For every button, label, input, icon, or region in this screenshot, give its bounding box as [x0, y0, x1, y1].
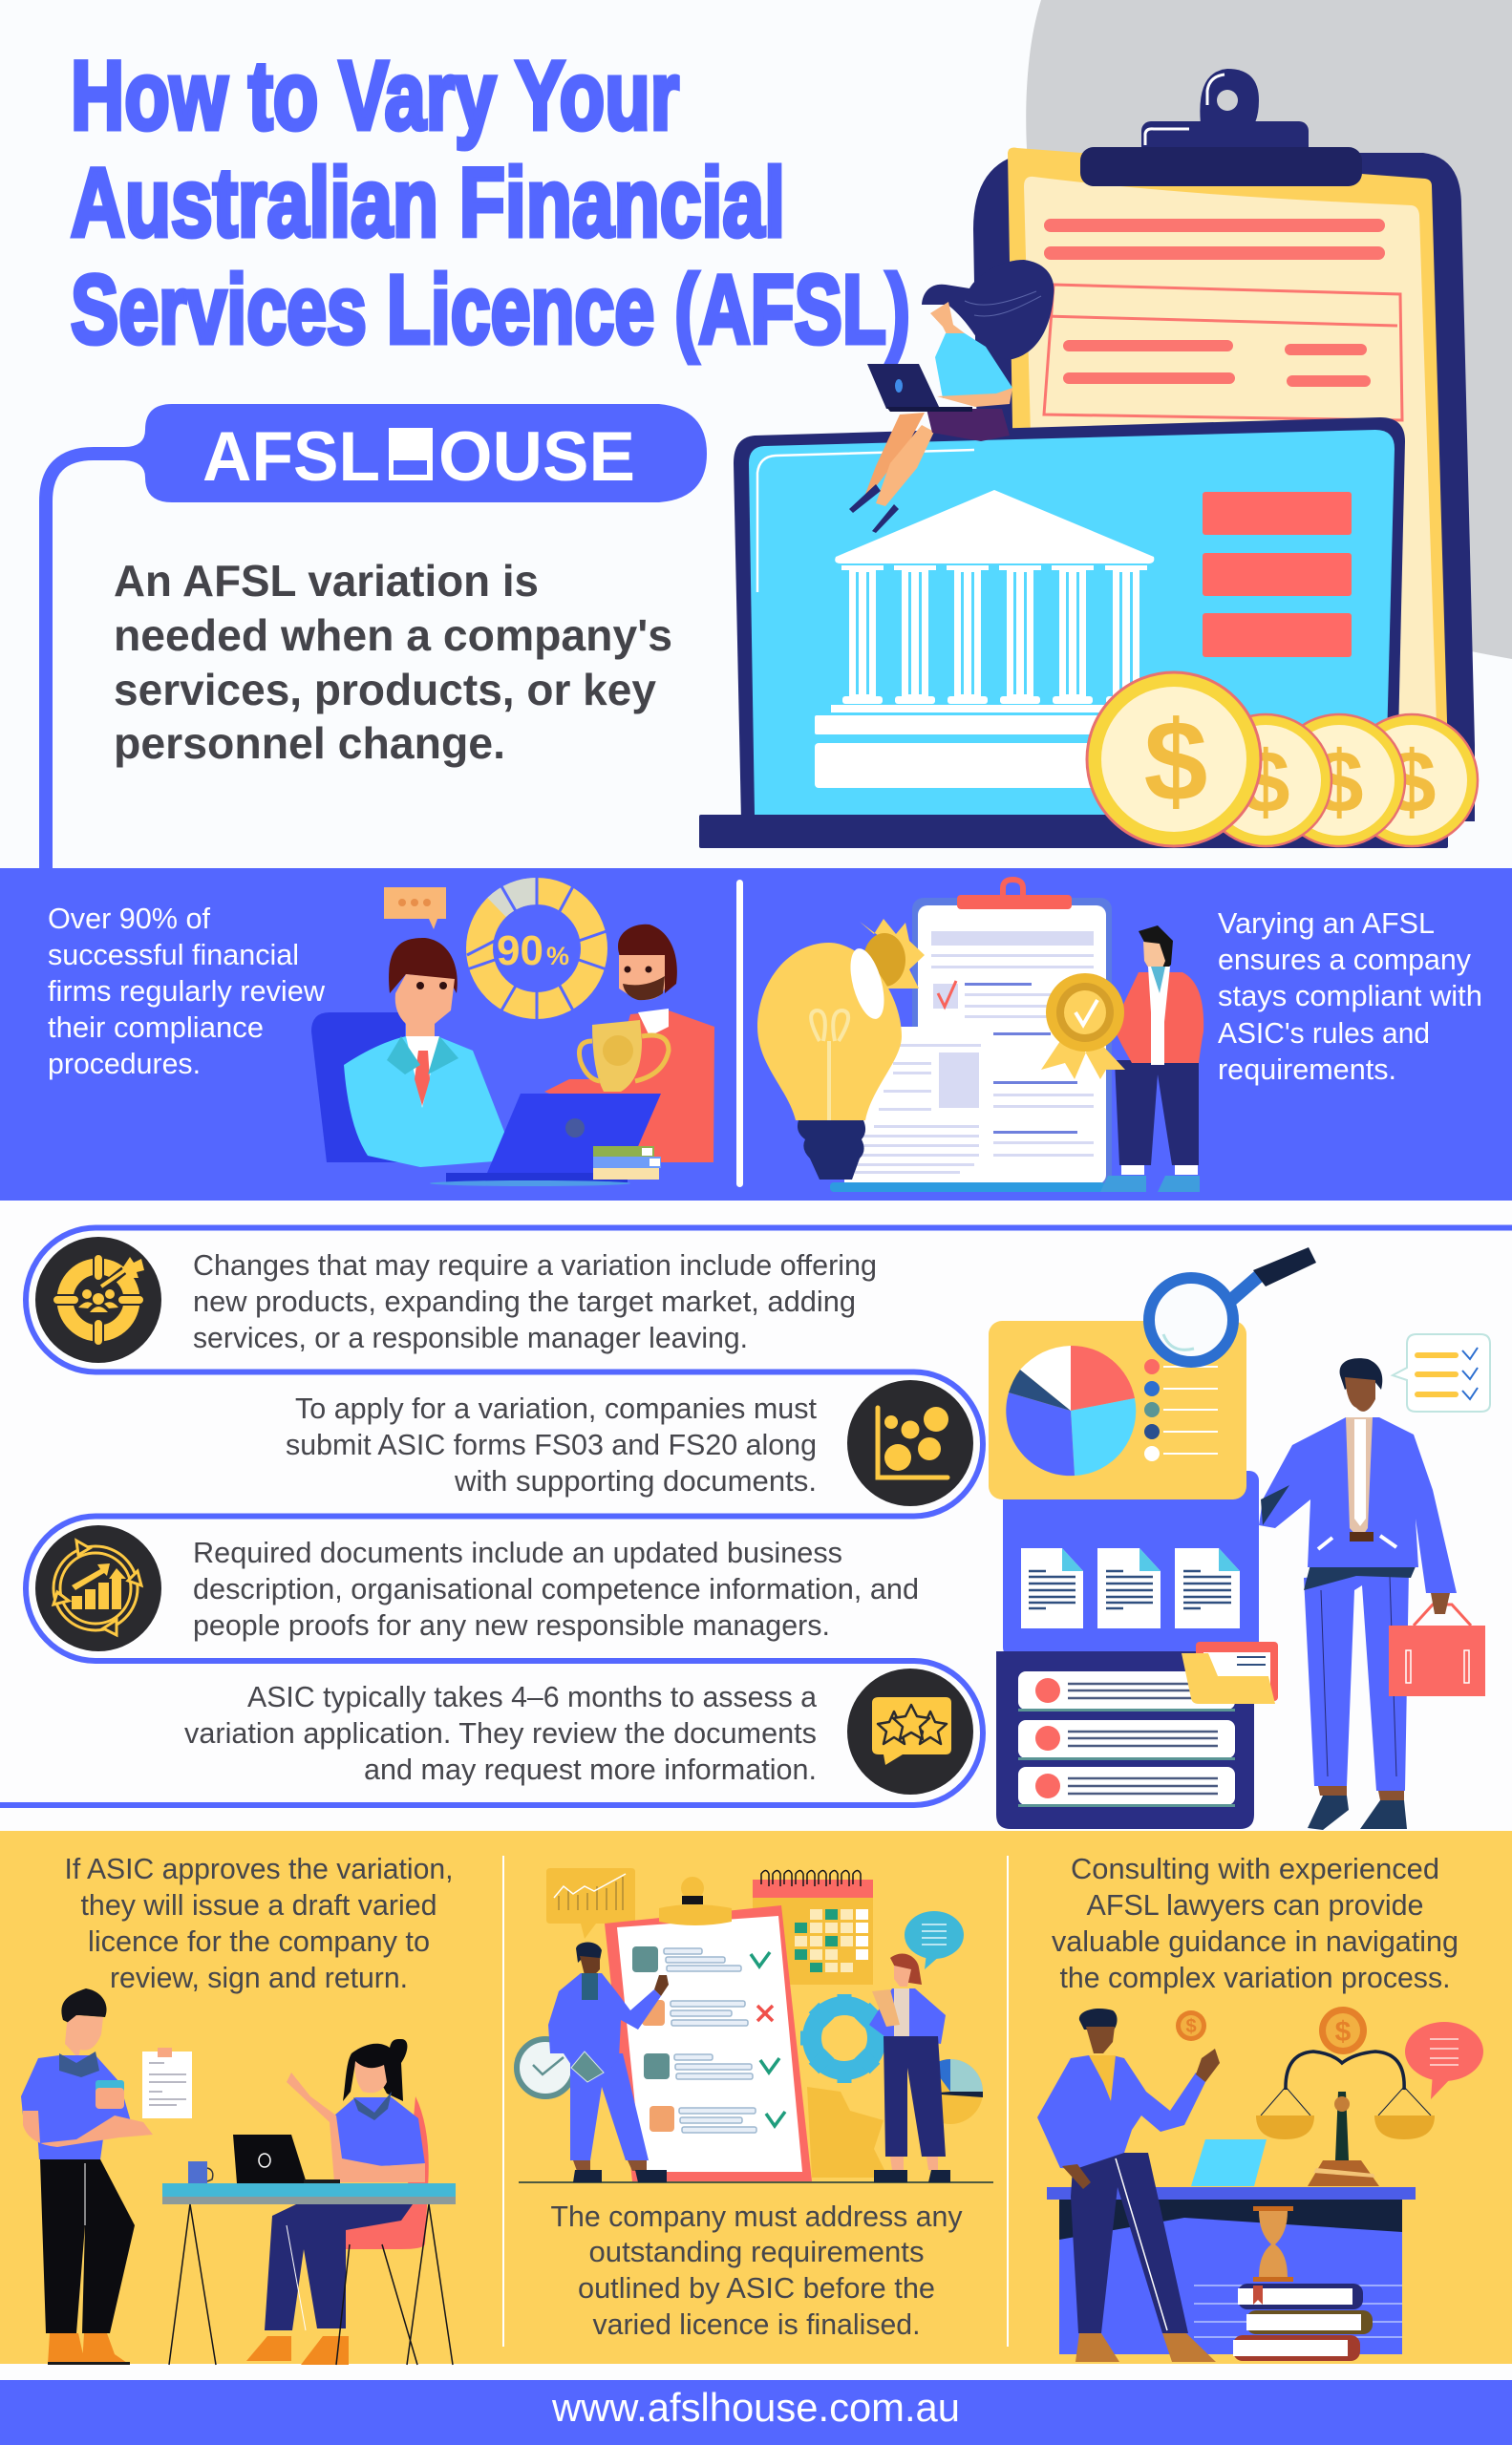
- text: varying an AFSL: [1218, 906, 1482, 1086]
- text: Changes that may require a variation include offering: [193, 1248, 877, 1282]
- coins: $: [1314, 734, 1364, 831]
- red panels: [1203, 492, 1352, 657]
- text: outstanding requirements: The company must address any: [550, 2200, 963, 2233]
- man with red jacket and trophy: [544, 925, 714, 1162]
- intro text: needed when a company's: [114, 610, 672, 660]
- intro text: An AFSL variation is: [114, 556, 539, 606]
- checklist clipboard: [605, 1877, 812, 2181]
- panel: blue statistics band: [0, 868, 1512, 1201]
- clipboard: [912, 880, 1112, 1189]
- text: varying an AFSL: ensures a company: [1218, 943, 1471, 976]
- text: varying an AFSL: stays compliant with: [1218, 979, 1482, 1012]
- clipboard paper: [1008, 148, 1448, 755]
- text: and may request more information.: [364, 1753, 817, 1786]
- text: 90 percent: Over 90% of: [48, 902, 210, 935]
- illustration: man with pie chart and filing cabinet: [989, 1247, 1490, 1830]
- man in blue suit: [1259, 1358, 1485, 1830]
- serpentine outline of the steps: [0, 1228, 1512, 1805]
- illustration: two people at a desk: [21, 1988, 456, 2365]
- intro text: personnel change.: [114, 718, 505, 768]
- text: consulting lawyers: AFSL lawyers can provide: [1087, 1888, 1423, 1922]
- clipboard clip: [1080, 69, 1362, 186]
- text: approval: they will issue a draft varied: [80, 1888, 437, 1922]
- coins: [1176, 2007, 1367, 2054]
- text: new products, expanding the target market, adding: [193, 1285, 856, 1318]
- title: [71, 41, 910, 364]
- light bulb: [757, 943, 902, 1180]
- man holding certificate badge: [1041, 925, 1203, 1192]
- footer: www.afslhouse.com.au: [551, 2385, 960, 2430]
- connector line to logo pill: [46, 454, 153, 868]
- text: ASIC typically takes 4–6 months to assess a: [247, 1680, 818, 1713]
- coins: $: [1387, 734, 1437, 831]
- coins: [1087, 672, 1478, 846]
- chart bubble: [546, 1868, 635, 1939]
- 90 percent donut: 90%: [497, 927, 569, 974]
- illustration: checklist team: [517, 1868, 993, 2183]
- icon: rating stars: [847, 1669, 973, 1795]
- document: [830, 1027, 1105, 1192]
- text: outstanding requirements: [550, 2200, 963, 2341]
- scales: [1256, 2052, 1435, 2186]
- step 1: [35, 1237, 877, 1363]
- text: varying an AFSL: Varying an AFSL: [1218, 906, 1435, 940]
- illustration: lawyer with scales: [1037, 2007, 1483, 2362]
- checklist speech bubble: [1393, 1334, 1490, 1412]
- man with document: [21, 1988, 192, 2365]
- bank icon: [815, 490, 1154, 788]
- coins: $: [1335, 2016, 1352, 2048]
- clock: [517, 2039, 574, 2096]
- text: description, organisational competence information, and: [193, 1572, 919, 1605]
- text: approval: If ASIC approves the variation,: [65, 1852, 453, 1885]
- coins: $: [1144, 697, 1207, 825]
- dark cabinet: [996, 1651, 1254, 1829]
- yellow gear and pie: [807, 2059, 983, 2178]
- icon: growth chart: [35, 1525, 161, 1651]
- text: [286, 1392, 817, 1498]
- documents: [1021, 1548, 1240, 1628]
- man presenting: [548, 1943, 669, 2182]
- text: Required documents include an updated business: [193, 1536, 842, 1569]
- text: 90 percent: [48, 902, 326, 1080]
- text: 90 percent: their compliance: [48, 1010, 264, 1044]
- text: [184, 1680, 818, 1786]
- text: varying an AFSL: requirements.: [1218, 1052, 1396, 1086]
- blue cabinet: [1003, 1471, 1259, 1657]
- title: How to Vary Your: [71, 41, 679, 150]
- coins: $: [1185, 2016, 1197, 2037]
- text: submit ASIC forms FS03 and FS20 along: [286, 1428, 817, 1461]
- text: consulting lawyers: valuable guidance in navigating: [1052, 1924, 1459, 1958]
- chair: [330, 2096, 429, 2249]
- text: consulting lawyers: the complex variation process.: [1060, 1961, 1450, 1994]
- step 3: [35, 1525, 919, 1651]
- text: 90 percent: successful financial: [48, 938, 299, 971]
- red speech bubble: [1405, 2022, 1483, 2099]
- man: [1037, 2009, 1220, 2362]
- text: To apply for a variation, companies must: [295, 1392, 817, 1425]
- text: outstanding requirements: outlined by ASIC before the: [578, 2271, 935, 2305]
- text: outstanding requirements: outstanding requirements: [588, 2235, 925, 2268]
- text: varying an AFSL: ASIC's rules and: [1218, 1016, 1430, 1050]
- step 2: [286, 1380, 973, 1506]
- intro text: services, products, or key: [114, 665, 656, 714]
- blue gear: [800, 1994, 888, 2083]
- clipboard board: [973, 153, 1475, 821]
- teal speech bubble: [905, 1911, 964, 1969]
- coins: $: [1241, 734, 1290, 831]
- pie chart board: [989, 1321, 1246, 1499]
- text: services, or a responsible manager leaving.: [193, 1321, 748, 1354]
- document: [142, 2052, 192, 2118]
- laptop and mug: [188, 2135, 340, 2184]
- books: [1233, 2284, 1373, 2361]
- text: people proofs for any new responsible managers.: [193, 1608, 830, 1642]
- text: approval: [65, 1852, 453, 1994]
- rosette badge: [1041, 973, 1125, 1079]
- title: Australian Financial: [71, 148, 785, 257]
- logo pill: AFSL HOUSE: AFSL: [202, 418, 380, 496]
- intro text: [114, 556, 672, 768]
- icon: bubble chart: [847, 1380, 973, 1506]
- ground line: [519, 2181, 993, 2183]
- text: approval: review, sign and return.: [110, 1961, 408, 1994]
- text: 90 percent: procedures.: [48, 1047, 201, 1080]
- illustration: clipboard, laptop, bank and coins: [699, 69, 1478, 848]
- magnifying glass: [1149, 1247, 1316, 1362]
- text: [193, 1536, 919, 1642]
- text: approval: licence for the company to: [88, 1924, 430, 1958]
- text: outstanding requirements: varied licence is finalised.: [592, 2307, 921, 2341]
- woman on laptop: [849, 260, 1054, 533]
- logo pill: AFSL HOUSE: OUSE: [438, 418, 635, 496]
- desk: [1047, 2187, 1416, 2354]
- panel: yellow band: [0, 1831, 1512, 2365]
- text: consulting lawyers: Consulting with experienced: [1071, 1852, 1439, 1885]
- footer: [0, 2380, 1512, 2445]
- illustration: light bulb, documents and certified man: [757, 880, 1203, 1192]
- text: variation application. They review the documents: [184, 1716, 817, 1750]
- divider: [736, 880, 743, 1187]
- red bag: [1389, 1593, 1485, 1696]
- text: [193, 1248, 877, 1354]
- folder: [1182, 1642, 1278, 1704]
- stack of books: [593, 1146, 661, 1180]
- laptop on table: [430, 1094, 661, 1186]
- man with blue suit: [311, 938, 506, 1167]
- laptop: [699, 417, 1448, 848]
- text: with supporting documents.: [454, 1464, 817, 1498]
- title: Services Licence (AFSL): [71, 255, 910, 364]
- 90 percent donut: [467, 877, 607, 1020]
- illustration: businessmen with 90 percent chart: [311, 877, 714, 1186]
- woman with paper: [869, 1953, 950, 2182]
- gear: [860, 919, 925, 989]
- hourglass: [1253, 2206, 1293, 2282]
- desk: [162, 2183, 456, 2365]
- laptop: [1191, 2139, 1267, 2186]
- speech bubble: [384, 887, 446, 929]
- calendar: [753, 1870, 873, 1985]
- text: consulting lawyers: [1052, 1852, 1459, 1994]
- icon: target: [35, 1237, 161, 1363]
- text: 90 percent: firms regularly review: [48, 974, 326, 1008]
- logo pill: AFSL HOUSE: [124, 404, 707, 502]
- woman at desk: [246, 2039, 425, 2365]
- step 4: [184, 1669, 973, 1795]
